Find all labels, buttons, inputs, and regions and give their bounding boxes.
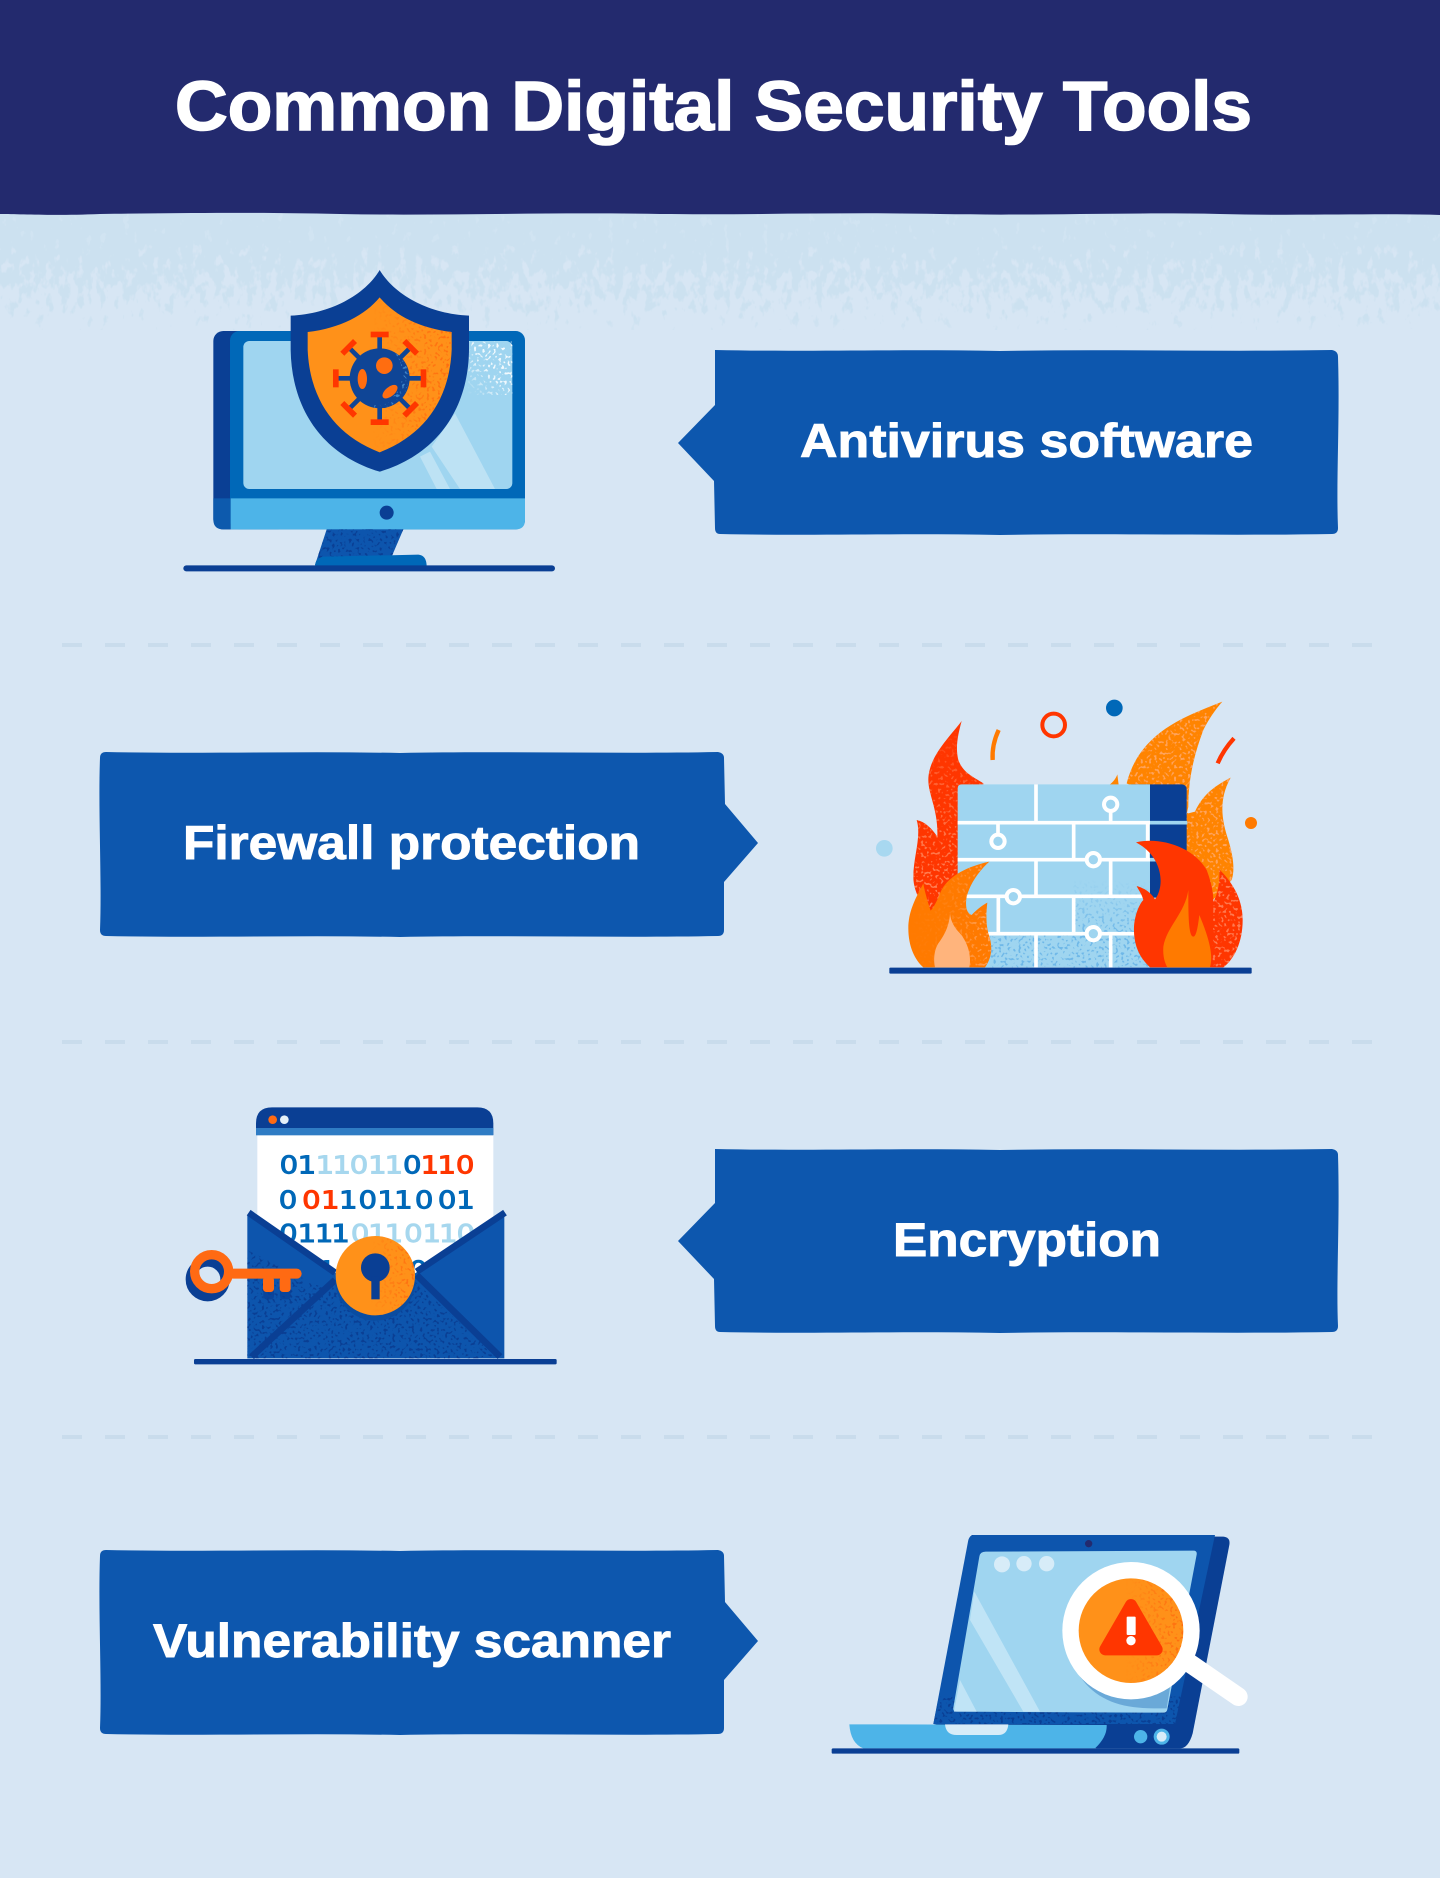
icon: encrypted envelope and key: 0011011001: [279, 1186, 475, 1215]
callout: Encryption: Encryption: [893, 1213, 1161, 1266]
icon: encrypted envelope and key: 01110110110: [279, 1220, 475, 1248]
header band: [0, 0, 1440, 215]
icon: firewall with flames: [876, 700, 1257, 974]
callout: Vulnerability scanner: Vulnerability scanner: [153, 1614, 671, 1667]
title: Common Digital Security Tools: [175, 67, 1252, 145]
divider 2: [62, 1040, 1378, 1044]
callout: Firewall protection: Firewall protection: [183, 816, 640, 869]
icon: encrypted envelope and key: 01110110110: [280, 1151, 474, 1180]
callout: Firewall protection: [99, 752, 758, 937]
icon: encrypted envelope and key: [190, 1107, 557, 1364]
divider 3: [62, 1435, 1378, 1439]
icon: encrypted envelope and key: 10: [318, 1256, 428, 1285]
callout: Antivirus software: Antivirus software: [800, 414, 1253, 467]
icon: monitor with antivirus shield: [183, 270, 555, 571]
callout: Vulnerability scanner: [99, 1550, 758, 1735]
icon: laptop with magnifier warning: [832, 1535, 1239, 1754]
textured band under header: [0, 212, 1440, 330]
divider 1: [62, 643, 1378, 647]
callout: Encryption: [678, 1149, 1339, 1333]
callout: Antivirus software: [678, 350, 1339, 535]
